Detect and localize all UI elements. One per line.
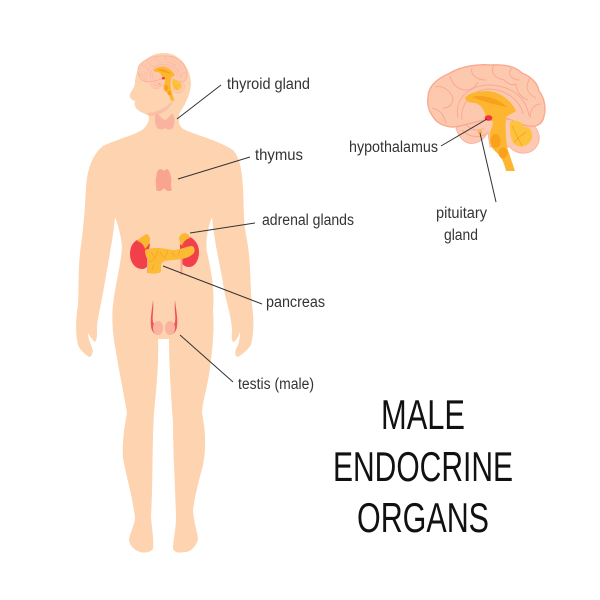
icon: small brain in head — [138, 56, 187, 101]
label: pituitary gland — [436, 205, 487, 244]
arrow: thymus leader — [178, 157, 250, 179]
arrow: thyroid gland leader — [177, 85, 221, 119]
title: ORGANS — [357, 494, 489, 541]
icon: testes and vas deferens — [151, 300, 177, 335]
title: MALE — [381, 391, 465, 438]
icon: thyroid gland — [155, 114, 174, 130]
label: hypothalamus: hypothalamus — [349, 139, 438, 156]
label: thymus: thymus — [255, 147, 303, 164]
arrow: hypothalamus leader — [441, 119, 487, 146]
large brain diagram — [428, 65, 545, 171]
arrow: pituitary gland leader — [480, 133, 496, 202]
title — [333, 391, 513, 541]
arrow: testis leader — [180, 335, 233, 382]
label: pituitary gland: pituitary — [436, 205, 487, 222]
label: pituitary gland: gland — [444, 227, 478, 244]
human body silhouette — [76, 53, 253, 553]
jaw shadow on neck — [147, 99, 174, 116]
label: adrenal glands: adrenal glands — [262, 212, 354, 229]
label: thyroid gland: thyroid gland — [227, 76, 310, 93]
label: pancreas: pancreas — [266, 294, 325, 311]
icon: kidneys, adrenal glands and pancreas — [130, 233, 199, 275]
icon: thymus — [156, 169, 172, 191]
arrow: pancreas leader — [163, 266, 262, 304]
arrow: adrenal glands leader — [190, 223, 255, 233]
label: testis (male): testis (male) — [238, 376, 314, 393]
title: ENDOCRINE — [333, 443, 513, 490]
